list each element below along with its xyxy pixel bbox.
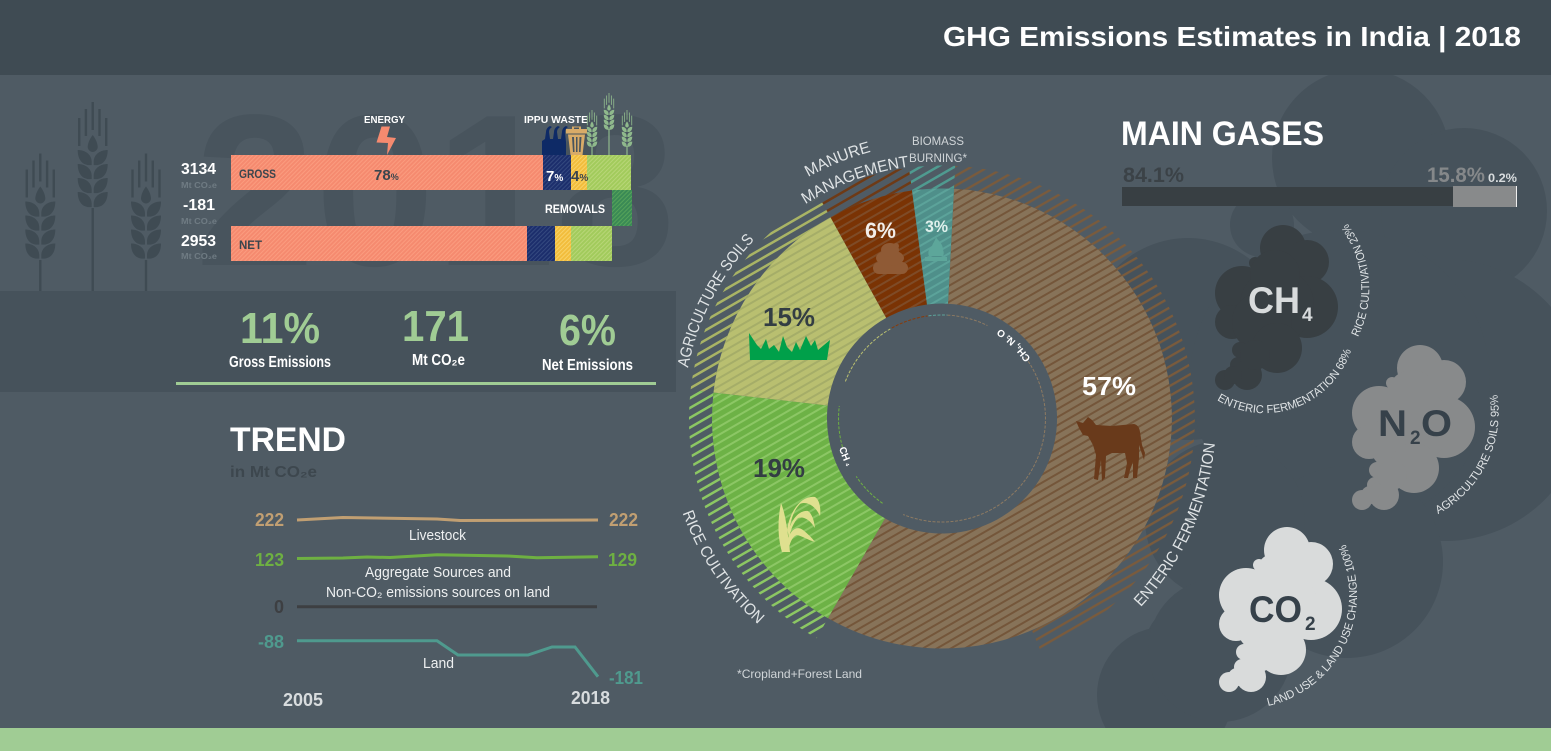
stat: 6% net emissions: Net Emissions <box>542 357 633 374</box>
chart value labels: 0 <box>274 597 284 617</box>
chart series labels: Livestock <box>409 528 467 544</box>
outer hatch ring <box>689 166 1195 651</box>
cloud: CO2 <box>1219 527 1358 706</box>
cloud: N2O: AGRICULTURE SOILS 95% <box>1436 395 1499 514</box>
line chart <box>297 518 598 677</box>
bar inner labels: 4% <box>571 168 588 185</box>
title: GHG Emissions Estimates in India | 2018 <box>943 21 1521 52</box>
chart value labels: 222 <box>255 510 284 530</box>
cloud: CO2: 2 <box>1305 614 1316 635</box>
bar value labels: Mt CO₂e <box>181 216 217 226</box>
panel: emissions bars <box>181 93 632 261</box>
gas share labels: 0.2% <box>1488 171 1517 185</box>
inner gas labels <box>840 330 1030 466</box>
stat: 11% gross emissions: Gross Emissions <box>229 354 331 371</box>
segment percentages: 57% <box>1082 371 1136 401</box>
inner dashed gas ring <box>839 315 1045 522</box>
gas share labels: 15.8% <box>1427 164 1485 187</box>
chart value labels <box>255 510 643 710</box>
chart value labels: 2005 <box>283 690 323 710</box>
icon: factory <box>542 126 568 155</box>
icon: manure <box>873 243 908 274</box>
cloud: N2O: 2 <box>1410 428 1421 449</box>
segment percentages: 19% <box>753 453 805 483</box>
ring labels: MANAGEMENT <box>800 156 908 204</box>
icon: trash can <box>566 126 587 155</box>
ring labels: ENTERIC FERMENTATION <box>1134 443 1215 606</box>
removals bar <box>612 190 632 226</box>
stat: 6% net emissions <box>542 306 633 374</box>
bar value labels: 3134 <box>181 161 216 178</box>
chart value labels: 2018 <box>571 688 610 708</box>
cloud: CO2: LAND USE & LAND USE CHANGE 100% <box>1267 545 1358 706</box>
stat: 171 Mt CO2e: Mt CO₂e <box>412 352 465 369</box>
bar inner labels: REMOVALS <box>545 204 605 216</box>
net bar <box>231 226 612 261</box>
trend unit: in Mt CO₂e <box>230 464 317 481</box>
chart value labels: 222 <box>609 510 638 530</box>
segment percentages <box>753 217 1136 483</box>
chart series labels <box>326 528 550 672</box>
ring labels: RICE CULTIVATION <box>683 510 765 624</box>
cloud: CH4: 4 <box>1302 305 1313 326</box>
segment percentages: 6% <box>865 218 896 243</box>
footer band <box>0 728 1551 751</box>
stat: 171 Mt CO2e: 171 <box>402 302 469 351</box>
bar inner labels: GROSS <box>239 167 276 181</box>
stats band <box>0 291 676 392</box>
segment: manure management <box>830 190 927 318</box>
main gases heading: MAIN GASES <box>1121 115 1324 153</box>
cloud: CH4: ENTERIC FERMENTATION 68% <box>1218 350 1351 414</box>
icon: cow <box>1076 417 1145 481</box>
gas share labels: 84.1% <box>1123 164 1184 187</box>
segment: enteric fermentation <box>828 189 1172 648</box>
chart value labels: -88 <box>258 632 284 652</box>
trend heading: TREND <box>230 421 346 459</box>
bar inner labels <box>239 114 605 252</box>
ring labels: AGRICULTURE SOILS <box>678 234 753 368</box>
segment: agriculture soils <box>714 217 886 406</box>
segment percentages: 3% <box>925 217 948 236</box>
chart value labels: 123 <box>255 550 284 570</box>
gas share labels <box>1123 164 1517 187</box>
panel: main gases <box>1121 115 1517 706</box>
background large cloud <box>1087 69 1551 751</box>
bar value labels: 2953 <box>181 233 216 250</box>
panel: trend <box>230 421 643 710</box>
cloud: N2O <box>1352 345 1499 514</box>
icon: fire <box>925 237 947 261</box>
chart series labels: Aggregate Sources and <box>365 565 511 581</box>
icon: energy bolt <box>376 126 396 155</box>
bar value labels: Mt CO₂e <box>181 180 217 190</box>
cloud: N2O: O <box>1421 403 1452 444</box>
icon: rice plant <box>778 497 820 552</box>
segment: rice cultivation <box>712 392 885 618</box>
stat: 6% net emissions: 6% <box>559 306 616 355</box>
cloud: CH4: CH <box>1248 280 1300 321</box>
bar value labels <box>181 161 217 261</box>
inner gas labels: CH 4 <box>840 447 850 466</box>
segment percentages: 15% <box>763 302 815 332</box>
gas share bar <box>1122 186 1517 207</box>
bar value labels: Mt CO₂e <box>181 251 217 261</box>
chart series labels: Non-CO₂ emissions sources on land <box>326 585 550 601</box>
cloud: CO2: CO <box>1249 589 1302 630</box>
cloud: N2O: N <box>1378 403 1407 444</box>
stat: 11% gross emissions: 11% <box>240 304 320 353</box>
chart series labels: Land <box>423 656 454 672</box>
ring labels: MANURE <box>804 142 870 176</box>
inner gas labels: CH4, N2 O <box>998 330 1030 362</box>
biomass burning label: BIOMASS <box>912 134 964 148</box>
footnote: *Cropland+Forest Land <box>737 667 862 681</box>
donut chart <box>678 134 1215 649</box>
background year 2018: 2018 <box>195 69 675 311</box>
ring labels <box>678 142 1215 624</box>
icon: grass <box>749 333 830 360</box>
bar inner labels: 78% <box>374 167 399 184</box>
icon: background wheat stalks <box>25 102 161 291</box>
bar inner labels: ENERGY <box>364 114 405 126</box>
panel: key statistics <box>176 302 656 385</box>
stat: 171 Mt CO2e <box>402 302 469 369</box>
chart value labels: 129 <box>608 550 637 570</box>
biomass burning label <box>909 134 967 165</box>
segment: biomass burning <box>912 189 954 304</box>
chart value labels: -181 <box>609 668 643 688</box>
bar inner labels: IPPU WASTE <box>524 114 588 126</box>
cloud: CH4: RICE CULTIVATION 23% <box>1342 224 1370 336</box>
bar inner labels: NET <box>239 238 263 252</box>
icon: green wheat <box>587 93 632 155</box>
gross bar <box>231 155 631 190</box>
bar inner labels: 7% <box>546 168 563 185</box>
header band <box>0 0 1551 75</box>
biomass burning label: BURNING* <box>909 151 967 165</box>
cloud: CH4 <box>1215 224 1370 414</box>
stat: 11% gross emissions <box>229 304 331 371</box>
bar value labels: -181 <box>183 197 215 214</box>
